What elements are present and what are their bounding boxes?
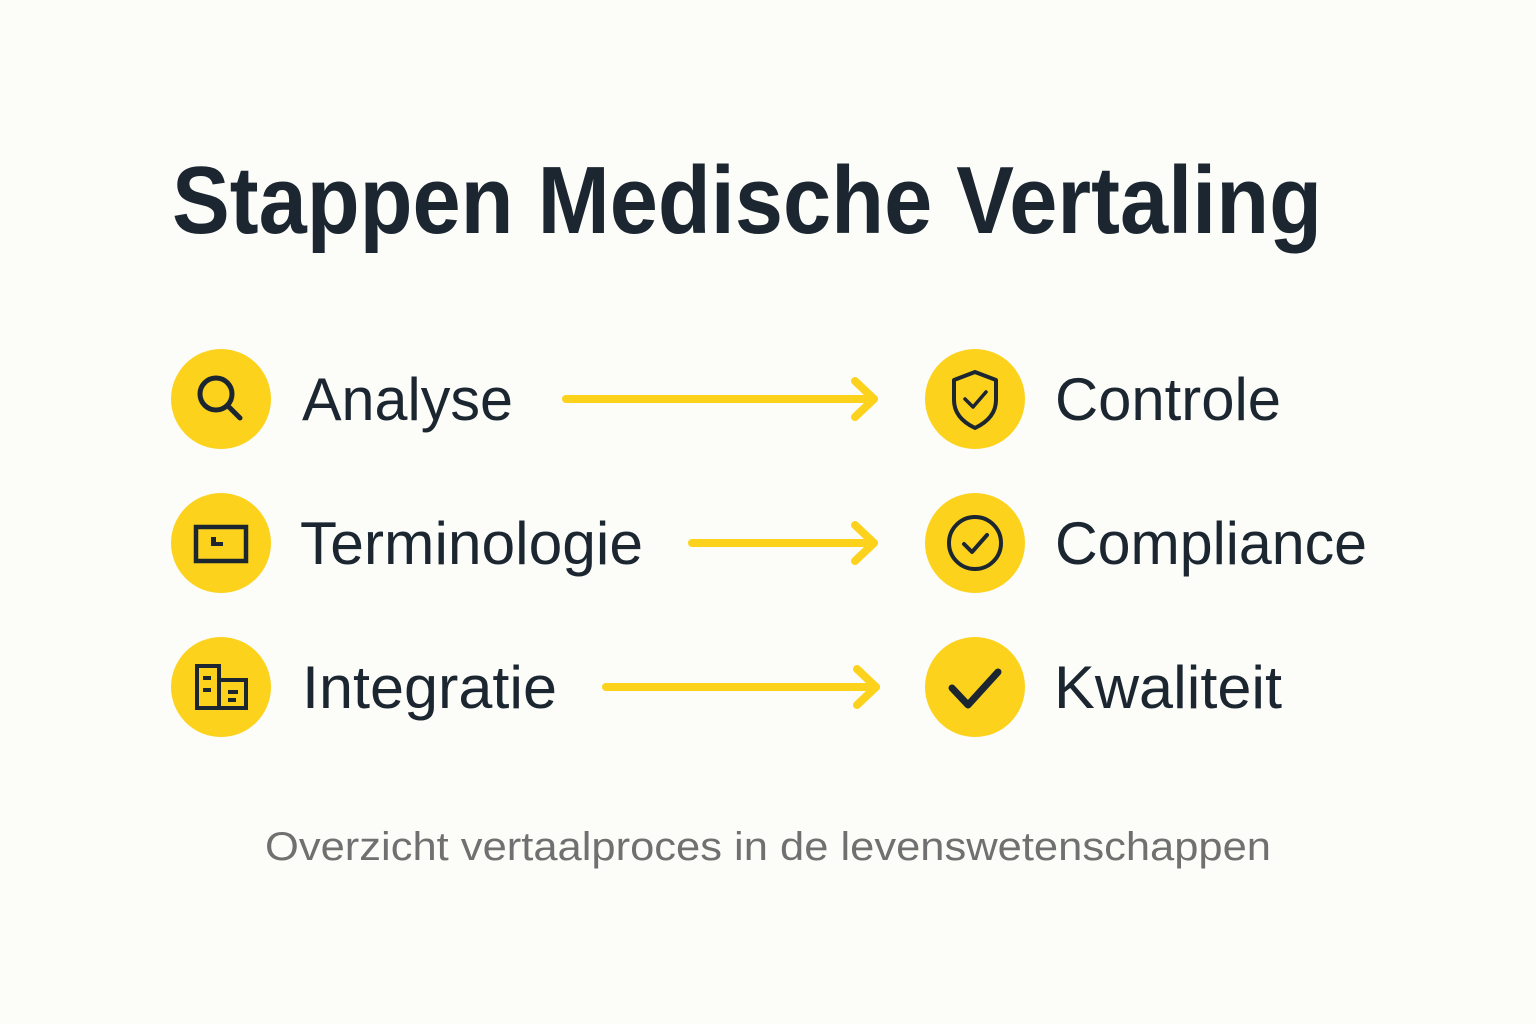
- label: Compliance: Compliance: [1055, 510, 1367, 577]
- label: Analyse: Analyse: [302, 366, 513, 433]
- arrow 3: [606, 669, 876, 705]
- icon: circle check: [925, 493, 1025, 593]
- label: Integratie: Integratie: [302, 654, 557, 721]
- icon: magnifier: [171, 349, 271, 449]
- icon: shield check: [925, 349, 1025, 449]
- icon: check: [925, 637, 1025, 737]
- step: Compliance: [925, 493, 1367, 593]
- arrow 1: [566, 381, 874, 417]
- subtitle: Overzicht vertaalproces in de levenswetenschappen: [265, 825, 1271, 869]
- step: Controle: [925, 349, 1281, 449]
- label: Kwaliteit: Kwaliteit: [1054, 654, 1282, 721]
- step: Kwaliteit: [925, 637, 1282, 737]
- step: Terminologie: [171, 493, 643, 593]
- title: Stappen Medische Vertaling: [172, 147, 1322, 254]
- label: Terminologie: Terminologie: [300, 510, 643, 577]
- step: Analyse: [171, 349, 513, 449]
- icon: buildings: [171, 637, 271, 737]
- label: Controle: Controle: [1055, 366, 1281, 433]
- step: Integratie: [171, 637, 557, 737]
- arrow 2: [692, 525, 874, 561]
- icon: screen: [171, 493, 271, 593]
